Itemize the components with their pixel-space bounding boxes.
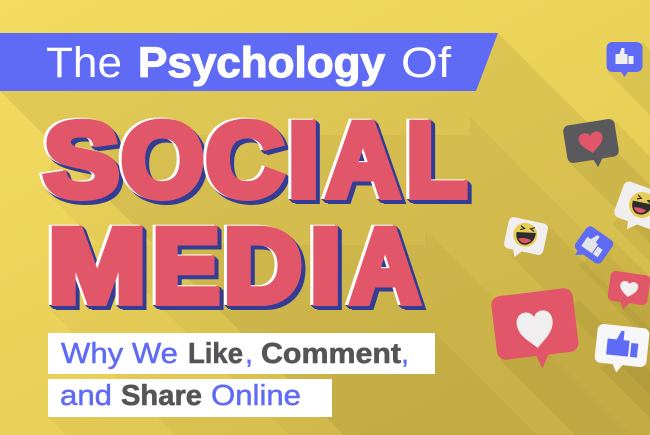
icon: dark heart bubble bbox=[562, 118, 621, 172]
subtitle line 1: , bbox=[245, 338, 253, 370]
icon: large red heart bubble bbox=[490, 287, 581, 374]
subtitle line 1: , bbox=[401, 338, 409, 370]
subtitle line 2: Online bbox=[211, 380, 301, 412]
banner text: Psychology bbox=[138, 39, 385, 87]
headline: SOCIAL MEDIA: D bbox=[224, 207, 302, 325]
icon: white laughing emoji bubble, right bbox=[610, 180, 650, 240]
icon: white thumbs-up bubble bbox=[593, 323, 650, 376]
subtitle line 1: Comment bbox=[261, 338, 401, 370]
headline: SOCIAL MEDIA: O bbox=[121, 102, 204, 219]
subtitle line 1: Why We bbox=[61, 338, 178, 370]
icon: blue thumbs-up bubble, tilted bbox=[570, 224, 615, 270]
subtitle line 2: Share bbox=[121, 380, 202, 412]
subtitle line 2 bbox=[48, 379, 332, 417]
headline: SOCIAL MEDIA: E bbox=[153, 207, 220, 325]
headline: SOCIAL MEDIA: I bbox=[310, 207, 341, 324]
headline: SOCIAL MEDIA: S bbox=[44, 102, 119, 219]
banner text bbox=[46, 39, 452, 87]
icon: blue thumbs-up bubble bbox=[606, 42, 642, 77]
headline: SOCIAL MEDIA: A bbox=[351, 208, 420, 325]
icon: white laughing emoji bubble, left bbox=[502, 216, 549, 263]
banner text: Of bbox=[401, 39, 452, 87]
headline: SOCIAL MEDIA: I bbox=[288, 101, 319, 218]
headline: SOCIAL MEDIA: M bbox=[48, 207, 146, 325]
headline: SOCIAL MEDIA: A bbox=[327, 101, 400, 218]
subtitle line 1 bbox=[48, 333, 435, 374]
icon: small red heart bubble bbox=[606, 270, 650, 313]
title banner bbox=[0, 33, 498, 91]
banner text: The bbox=[46, 39, 122, 87]
subtitle line 1: Like bbox=[188, 338, 243, 370]
headline: SOCIAL MEDIA bbox=[44, 101, 467, 325]
subtitle line 2: and bbox=[60, 380, 112, 412]
headline: SOCIAL MEDIA: C bbox=[206, 101, 284, 219]
headline: SOCIAL MEDIA: L bbox=[406, 101, 467, 219]
